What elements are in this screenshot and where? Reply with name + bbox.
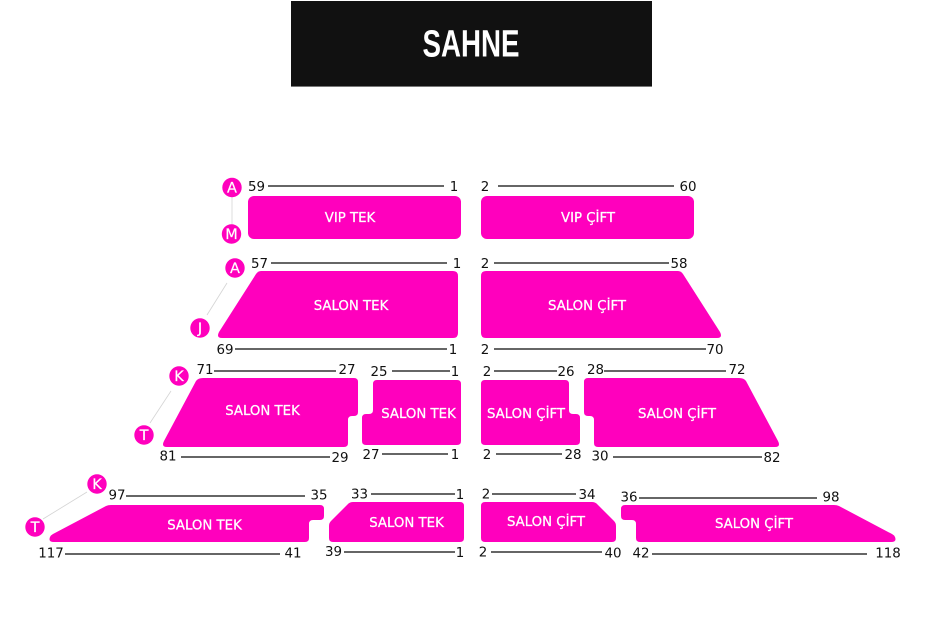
row guide: A to M: [222, 178, 242, 244]
block: VIP CIFT: 60: [679, 180, 697, 195]
block: SALON TEK row 3 outer: 29: [331, 451, 349, 466]
row guide: K to T rear: K: [92, 477, 102, 493]
block: SALON CIFT row 3 inner: 26: [557, 365, 575, 380]
block: SALON TEK row 4 outer: SALON TEK: [167, 518, 242, 533]
block: SALON CIFT row 2: SALON ÇİFT: [548, 296, 627, 314]
block: VIP TEK: [248, 180, 461, 239]
block: SALON TEK row 4 outer: 97: [108, 488, 126, 503]
block: SALON CIFT row 2: 2: [481, 343, 489, 358]
block: SALON TEK row 3 outer: SALON TEK: [225, 404, 300, 419]
block: SALON TEK row 3 inner: 1: [451, 448, 459, 463]
block: SALON TEK row 2: 1: [449, 343, 457, 358]
block: SALON TEK row 2: 69: [216, 343, 234, 358]
row guide: K to T middle: T: [139, 428, 149, 444]
block: SALON CIFT row 3 outer: 72: [728, 363, 746, 378]
row guide: A to M: A: [227, 181, 237, 197]
block: SALON CIFT row 2: [481, 257, 724, 358]
row guide: A to J: [190, 258, 245, 338]
block: SALON TEK row 2: SALON TEK: [314, 299, 389, 314]
row guide: A to M: M: [225, 227, 238, 243]
block: SALON TEK row 3 outer: 27: [338, 363, 356, 378]
block: SALON CIFT row 4 inner: 2: [479, 545, 487, 560]
block: SALON TEK row 3 outer: 71: [196, 363, 214, 378]
block: SALON TEK row 2: [216, 257, 461, 358]
block: VIP TEK: VIP TEK: [325, 211, 376, 226]
stage title: SAHNE: [422, 24, 520, 66]
block: VIP TEK: 1: [450, 180, 458, 195]
block: VIP CIFT: [481, 180, 697, 239]
block: SALON CIFT row 4 outer: 36: [620, 490, 638, 505]
block: SALON TEK row 2: 1: [453, 257, 461, 272]
block: SALON CIFT row 3 inner: 2: [483, 448, 491, 463]
block: SALON CIFT row 4 inner: SALON ÇİFT: [507, 512, 586, 530]
block: VIP CIFT: 2: [481, 180, 489, 195]
block: SALON CIFT row 4 outer: 118: [875, 546, 901, 561]
block: VIP CIFT: VIP ÇİFT: [561, 208, 616, 226]
row guide: K to T middle: [134, 366, 189, 445]
block: SALON CIFT row 3 outer: SALON ÇİFT: [638, 404, 717, 422]
block: SALON TEK row 4 outer: 41: [284, 546, 302, 561]
block: SALON TEK row 4 outer: 117: [38, 546, 64, 561]
block: SALON CIFT row 3 inner: [481, 365, 582, 463]
block: SALON TEK row 4 inner: SALON TEK: [369, 516, 444, 531]
block: SALON TEK row 3 inner: 25: [370, 365, 388, 380]
row guide: K to T rear: [25, 474, 107, 537]
row guide: K to T middle: K: [174, 369, 184, 385]
block: SALON CIFT row 3 outer: [584, 363, 781, 466]
block: VIP TEK: 59: [248, 180, 265, 195]
block: SALON CIFT row 4 outer: SALON ÇİFT: [715, 514, 794, 532]
block: SALON TEK row 4 inner: 33: [351, 487, 368, 502]
stage banner: [291, 1, 652, 87]
block: SALON CIFT row 3 inner: 2: [483, 365, 491, 380]
row guide: K to T rear: T: [30, 520, 40, 536]
block: SALON CIFT row 4 inner: 2: [482, 487, 490, 502]
block: SALON TEK row 4 inner: 39: [325, 545, 342, 560]
block: SALON TEK row 4 outer: 35: [310, 488, 328, 503]
block: SALON CIFT row 3 outer: 30: [591, 449, 609, 464]
block: SALON TEK row 3 inner: SALON TEK: [381, 407, 456, 422]
block: SALON CIFT row 4 outer: [620, 490, 901, 561]
block: SALON TEK row 3 inner: 1: [451, 365, 459, 380]
block: SALON CIFT row 3 inner: SALON ÇİFT: [487, 404, 566, 422]
block: SALON TEK row 4 inner: [325, 487, 464, 561]
block: SALON CIFT row 2: 2: [481, 257, 489, 272]
block: SALON CIFT row 4 outer: 42: [632, 546, 650, 561]
block: SALON CIFT row 4 inner: [479, 487, 622, 561]
block: SALON TEK row 4 inner: 1: [456, 546, 464, 561]
row guide: A to J: J: [197, 321, 202, 337]
block: SALON CIFT row 3 outer: 28: [587, 363, 604, 378]
block: SALON CIFT row 3 outer: 82: [763, 451, 781, 466]
block: SALON CIFT row 2: 70: [706, 343, 724, 358]
block: SALON CIFT row 4 inner: 34: [578, 488, 596, 503]
block: SALON TEK row 3 outer: [159, 363, 358, 466]
block: SALON TEK row 2: 57: [251, 257, 268, 272]
block: SALON TEK row 4 inner: 1: [456, 488, 464, 503]
row guide: A to J: A: [230, 261, 240, 277]
block: SALON CIFT row 4 outer: 98: [822, 490, 840, 505]
block: SALON TEK row 3 outer: 81: [159, 449, 177, 464]
block: SALON TEK row 3 inner: [362, 365, 461, 463]
block: SALON CIFT row 4 inner: 40: [604, 546, 622, 561]
block: SALON CIFT row 3 inner: 28: [564, 448, 582, 463]
block: SALON TEK row 3 inner: 27: [362, 448, 380, 463]
block: SALON CIFT row 2: 58: [670, 257, 688, 272]
block: SALON TEK row 4 outer: [38, 488, 328, 561]
